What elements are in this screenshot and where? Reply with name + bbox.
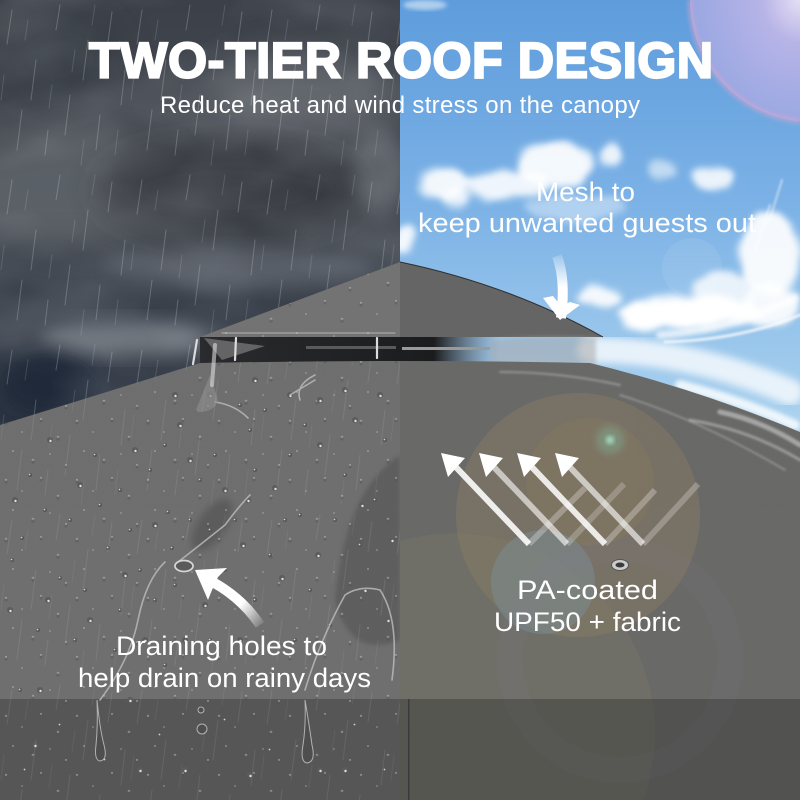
arrow 3 [517,453,655,544]
water trails [100,375,394,700]
rain streaks over storm sky [0,0,400,440]
callout: PA-coated fabric: PA-coated [517,575,658,605]
water droplets [0,360,400,800]
arrow: pointing to draining hole [195,568,260,625]
callout: PA-coated fabric: UPF50 + fabric [494,607,681,637]
arrow 4 [555,453,698,544]
reflected UV arrows [441,453,698,544]
lens flare circles [456,393,700,637]
title: TWO-TIER ROOF DESIGN [89,32,713,88]
vent mesh gap [200,337,596,366]
stormy sky: left half [0,0,405,440]
callout: mesh: Mesh to [536,177,635,207]
callout: mesh: keep unwanted guests out [418,208,757,238]
clear sky: right half [395,0,800,460]
lower roof tier [0,340,800,800]
hanging drip drops [96,700,313,763]
callout: PA-coated fabric [494,575,681,637]
drain hole grommet [175,560,193,572]
fabric texture [135,450,362,506]
arrow: curved pointing at mesh [543,256,580,320]
grommet: PA-coated side [612,560,628,570]
arrow 2 [479,453,624,544]
callout: mesh [418,177,757,238]
dripping water from vent [193,333,395,385]
callout: draining holes [78,631,371,693]
callout: draining holes: help drain on rainy days [78,663,371,693]
clouds [395,143,800,331]
rain streaks over canopy [0,360,400,800]
arrow 1 [441,453,585,544]
subtitle: Reduce heat and wind stress on the canopy [160,92,640,119]
callout: draining holes: Draining holes to [116,631,327,661]
upper roof tier [200,262,603,337]
bottom hem band [0,699,800,800]
wind wash on lower tier [500,372,800,470]
wind streaks [590,180,800,425]
